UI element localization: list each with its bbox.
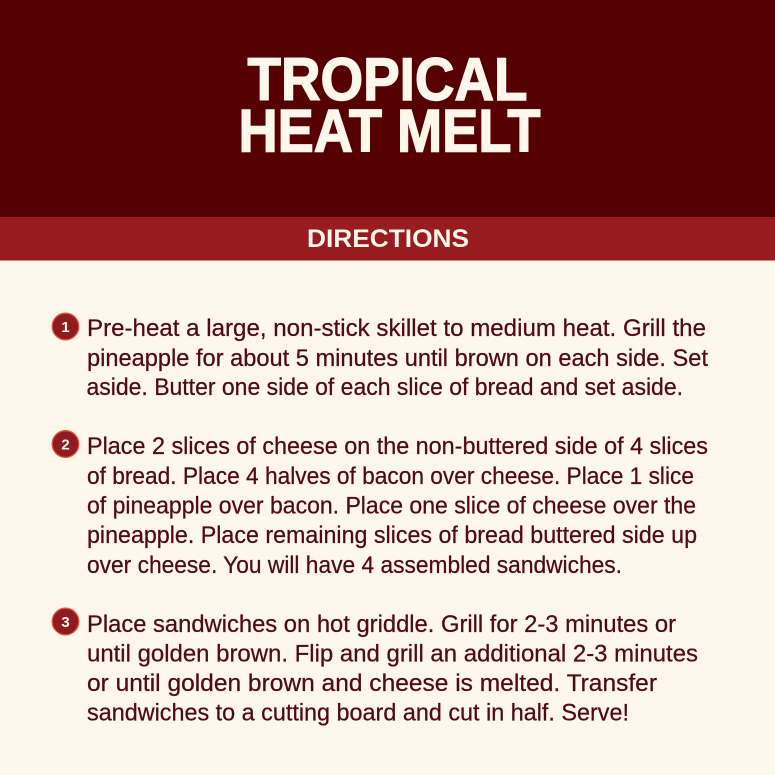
step 3 text xyxy=(87,611,698,726)
step 1 text: Pre-heat a large, non-stick skillet to medium heat. Grill the xyxy=(87,315,706,342)
directions band xyxy=(0,217,775,260)
step 3 text: Place sandwiches on hot griddle. Grill for 2-3 minutes or xyxy=(87,611,676,638)
step 2 text: Place 2 slices of cheese on the non-buttered side of 4 slices xyxy=(87,433,708,460)
step 2 text: of pineapple over bacon. Place one slice of cheese over the xyxy=(87,492,696,520)
step 1 text: aside. Butter one side of each slice of bread and set aside. xyxy=(86,374,683,401)
directions band: DIRECTIONS xyxy=(307,225,469,253)
step 1 text: pineapple for about 5 minutes until brown on each side. Set xyxy=(87,345,708,372)
icon: step number 2: 2 xyxy=(61,436,70,454)
step 2 text: of bread. Place 4 halves of bacon over cheese. Place 1 slice xyxy=(87,463,694,490)
icon: step number 2 xyxy=(52,431,79,457)
icon: step number 1 xyxy=(52,313,79,340)
step 1 xyxy=(52,313,708,401)
step 3 text: or until golden brown and cheese is melted. Transfer xyxy=(87,670,657,697)
header panel xyxy=(0,0,775,217)
step 2 text: over cheese. You will have 4 assembled sandwiches. xyxy=(87,552,622,579)
step 2 text xyxy=(87,433,708,579)
title: TROPICAL xyxy=(248,46,528,113)
step 2 text: pineapple. Place remaining slices of bread buttered side up xyxy=(87,522,697,549)
step 3 text: sandwiches to a cutting board and cut in half. Serve! xyxy=(87,700,629,726)
icon: step number 3: 3 xyxy=(61,614,70,631)
step 3 xyxy=(52,608,698,726)
step 2 xyxy=(52,431,708,579)
step 3 text: until golden brown. Flip and grill an additional 2-3 minutes xyxy=(87,640,698,668)
title: HEAT MELT xyxy=(238,98,540,164)
icon: step number 3 xyxy=(52,608,79,635)
title xyxy=(238,46,540,164)
icon: step number 1: 1 xyxy=(61,319,70,336)
step 1 text xyxy=(86,315,708,401)
